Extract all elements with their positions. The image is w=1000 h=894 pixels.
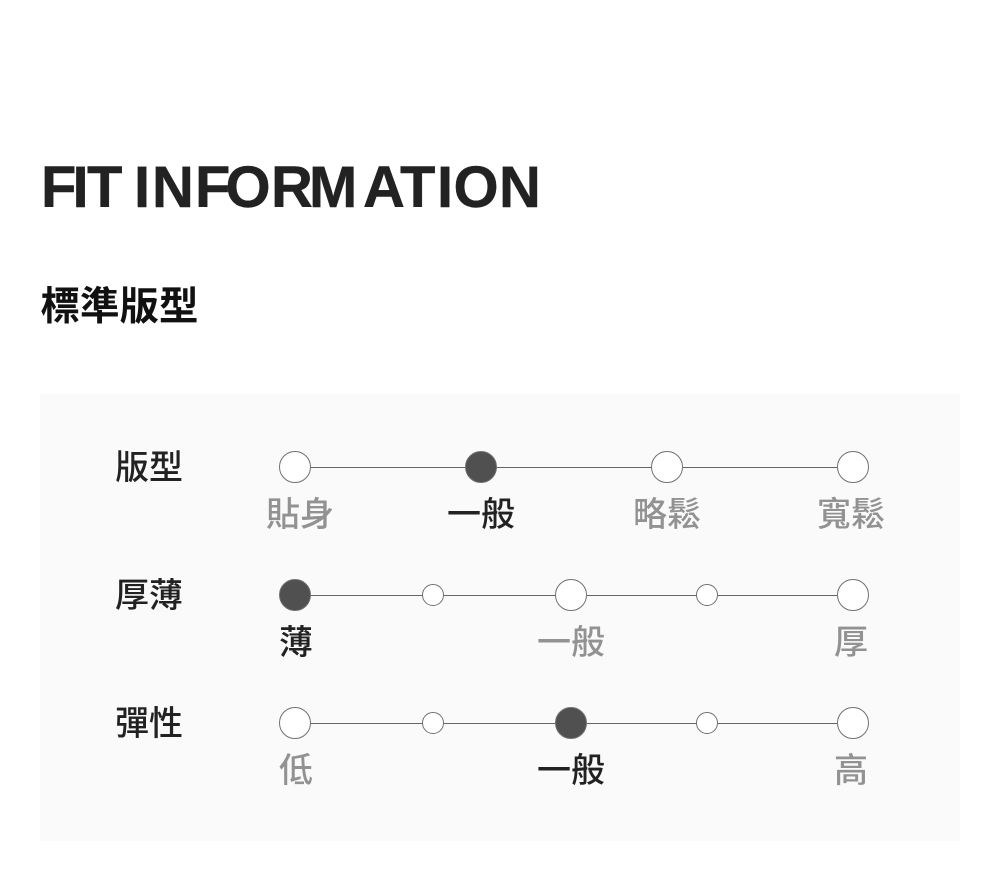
marker: thin selected — [280, 580, 310, 610]
marker: regular — [556, 580, 586, 610]
title: FIT INFORMATION — [41, 155, 541, 220]
row: fit — [115, 449, 885, 534]
option: slightly loose: 略鬆 — [633, 496, 701, 534]
option: regular: 一般 — [447, 496, 515, 534]
panel: fit scales — [40, 394, 960, 841]
option: thin: 薄 — [279, 624, 313, 662]
marker: loose — [838, 452, 868, 482]
label: thickness: 厚薄 — [115, 577, 183, 615]
marker: regular selected — [466, 452, 496, 482]
subtitle: 標準版型 — [40, 285, 198, 329]
row: thickness — [115, 577, 868, 662]
marker: low — [280, 708, 310, 738]
option: low: 低 — [279, 752, 313, 790]
option: regular: 一般 — [537, 624, 605, 662]
row: elasticity — [115, 705, 868, 790]
marker: slightly loose — [652, 452, 682, 482]
marker: thick — [838, 580, 868, 610]
option: high: 高 — [834, 752, 868, 790]
option: loose: 寬鬆 — [817, 496, 885, 534]
marker: intermediate — [696, 712, 718, 734]
scale line: thickness — [295, 594, 853, 596]
scale line: fit — [295, 466, 853, 468]
label: elasticity: 彈性 — [115, 705, 183, 743]
marker: fitted — [280, 452, 310, 482]
scale line: elasticity — [295, 722, 853, 724]
marker: intermediate — [422, 584, 444, 606]
label: fit: 版型 — [115, 449, 183, 487]
option: thick: 厚 — [834, 624, 868, 662]
marker: intermediate — [422, 712, 444, 734]
marker: intermediate — [696, 584, 718, 606]
option: regular: 一般 — [537, 752, 605, 790]
marker: regular selected — [556, 708, 586, 738]
option: fitted: 貼身 — [266, 496, 334, 534]
marker: high — [838, 708, 868, 738]
